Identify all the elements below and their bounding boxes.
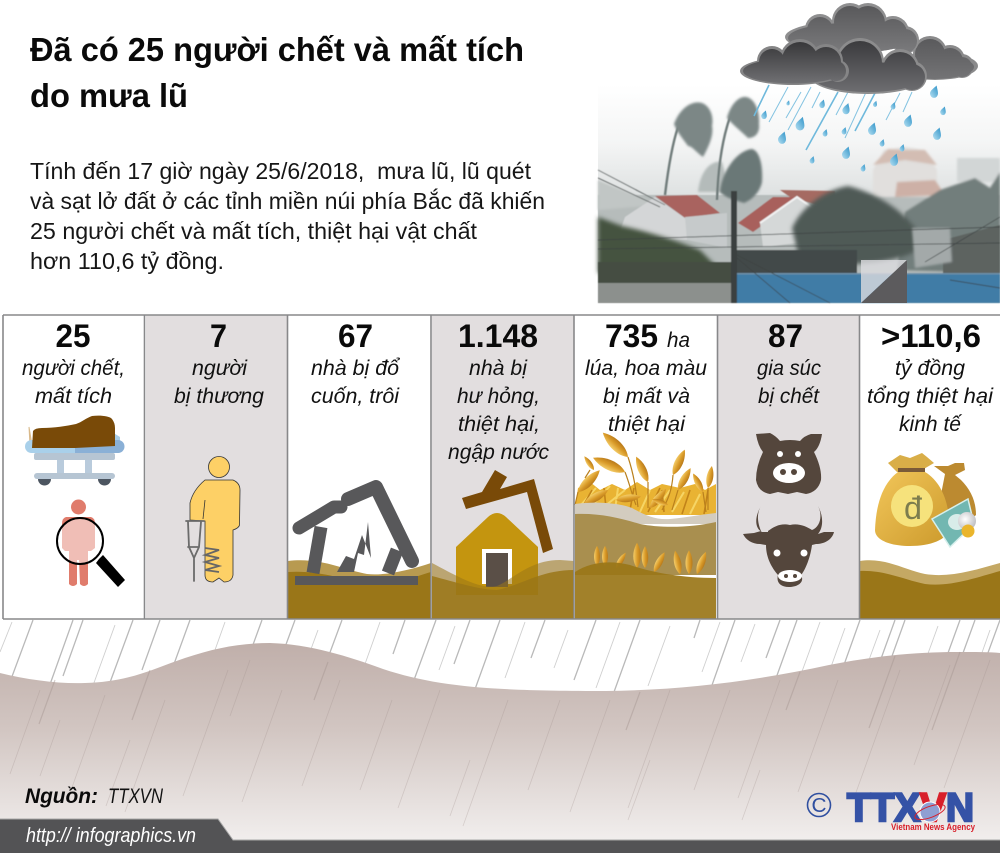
illustration: golden wheat field [575,429,716,619]
copyright mark: C [812,795,826,817]
label: dead and missing: người chết, [22,356,125,380]
panel: crops [575,318,716,619]
icon: person under magnifying glass [57,500,125,587]
label: crops: thiệt hại [608,412,686,436]
number: 1.148: 1.148 [458,318,538,354]
logo: TTXVN [808,786,975,832]
icon: money bags, banknote and coins: đ [904,490,922,526]
label: economic damage [867,356,994,436]
number: 25: 25 [56,318,90,354]
icon: money bags, banknote and coins [875,453,976,547]
source credit: TTXVN [108,785,164,808]
label: dead and missing: mất tích [35,384,112,408]
title: do mưa lũ [30,77,188,114]
panel: collapsed houses [288,318,431,619]
label: damaged houses: hư hỏng, [457,384,540,408]
label: injured: bị thương [174,384,264,408]
ground [288,560,431,619]
panel: economic damage [860,318,1000,619]
label: damaged houses: ngập nước [448,440,549,464]
title [30,31,524,114]
icon: flooded house with broken roof [456,470,553,595]
label: collapsed houses: nhà bị đổ [311,356,400,380]
photo: storm over houses [598,85,1000,303]
label: dead and missing [22,356,125,408]
icon: stretcher with covered body [25,416,124,486]
number: >110,6: >110,6 [881,318,981,354]
intro text block: Tính đến 17 giờ ngày 25/6/2018, mưa lũ, lũ quét [30,158,532,184]
icon: buffalo head [743,506,834,587]
label: injured: người [192,356,248,380]
label: damaged houses: nhà bị [469,356,528,380]
label: livestock [757,356,821,408]
label: collapsed houses: cuốn, trôi [311,384,400,408]
cloud: center front [810,38,927,94]
label: crops [585,356,707,436]
label: economic damage: kinh tế [899,412,963,436]
panel: dead and missing [22,318,125,587]
panel borders [3,315,1000,619]
panel: livestock [743,318,834,587]
ground [860,560,1000,619]
wordmark: TTXVN [847,786,974,830]
number: 7: 7 [210,318,227,354]
label: economic damage: tổng thiệt hại [867,384,994,408]
intro text block: hơn 110,6 tỷ đồng. [30,248,224,274]
label: economic damage: tỷ đồng [895,356,965,380]
label: livestock: gia súc [757,356,821,380]
label: crops: lúa, hoa màu [585,356,707,380]
cloud: right [892,36,978,80]
flood water [432,560,574,619]
agency name: Vietnam News Agency [891,822,975,832]
rain streaks from cloud [754,85,912,150]
globe emblem [913,801,947,823]
wheat stems [575,457,708,512]
intro text block: 25 người chết và mất tích, thiệt hại vật chất [30,218,478,244]
cloud: left front [740,39,849,85]
crutch [186,521,204,581]
number: 735 ha: ha [667,328,690,352]
storm clouds [740,3,978,94]
label: damaged houses [448,356,549,464]
corner triangle mark [861,260,907,303]
icon: injured person with crutch [186,456,240,582]
number: 87: 87 [768,318,803,354]
icon: pig head [756,433,822,494]
label: crops: bị mất và [603,384,690,408]
label: livestock: bị chết [758,384,820,408]
footer bar with URL [0,819,1000,853]
title: Đã có 25 người chết và mất tích [30,31,524,68]
cloud: back top [785,3,919,54]
label: collapsed houses [311,356,400,408]
number: 67: 67 [338,318,373,354]
panel: injured [174,318,264,582]
footer bar with URL: http:// infographics.vn [26,825,196,847]
label: damaged houses: thiệt hại, [458,412,540,436]
label: injured [174,356,264,408]
rain streaks background [0,620,1000,708]
wheat ears [599,429,632,461]
source credit [25,785,164,808]
number: 735 ha: 735 [605,318,658,354]
source credit: Nguồn: [25,785,98,808]
hill background [0,643,1000,853]
panel: damaged houses [432,318,574,619]
intro text block [30,158,545,274]
panel backgrounds: grey columns [146,315,859,619]
icon: collapsed house [295,487,418,585]
copyright mark [808,794,830,817]
palm trees [665,97,762,203]
intro text block: và sạt lở đất ở các tỉnh miền núi phía Bắc đã khiến [30,188,545,214]
number: 735 ha [605,318,690,354]
rain drops [761,86,946,172]
